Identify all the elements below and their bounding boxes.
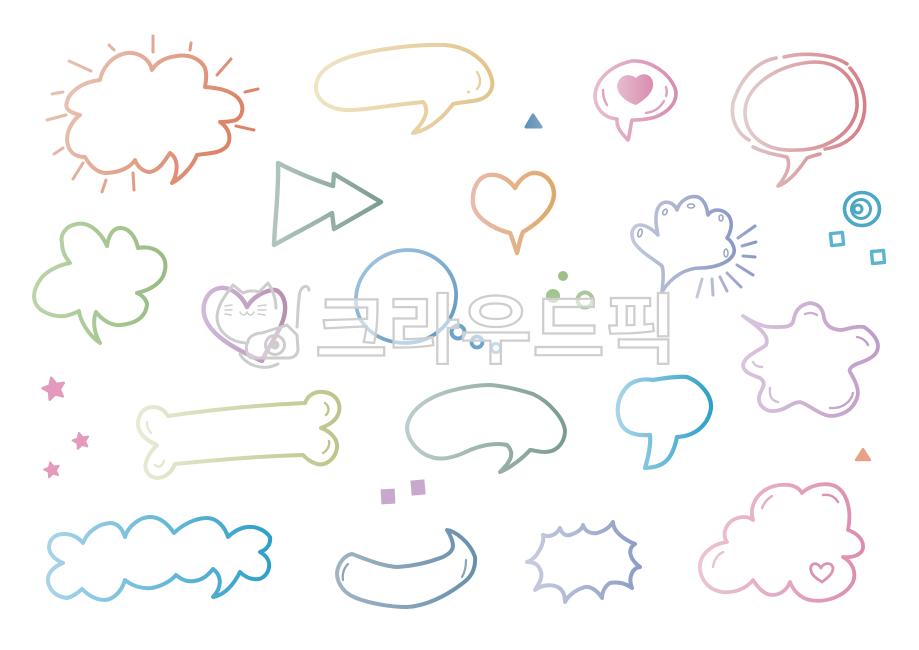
squares: mauve [381, 479, 426, 504]
bubble: pink with heart [595, 61, 676, 140]
bubble: green cloud [34, 224, 165, 343]
triangle: orange [856, 449, 870, 460]
bubble: orange sunburst cloud [47, 36, 258, 192]
bubble: sky blue [618, 377, 711, 468]
bubble: lilac blob [743, 303, 878, 416]
watermark: Korean site name: 크라우드픽 [315, 289, 677, 374]
bubble: bone [138, 392, 339, 478]
bubble: cyan long cloud [48, 517, 270, 600]
watermark: cat camera logo [217, 283, 309, 367]
bubble: periwinkle spiky [527, 522, 640, 602]
icon: heart [617, 74, 653, 105]
bubble: yellow oval [316, 45, 492, 133]
arrow [274, 163, 381, 245]
bubble: blue thought circle [356, 250, 500, 352]
bubble: periwinkle with rays [632, 197, 756, 297]
bubble: slate crescent [337, 530, 475, 607]
bubble: rose double oval [732, 54, 865, 186]
heart: lilac [204, 288, 285, 361]
spiral: teal target [844, 192, 880, 226]
heart: orange [473, 173, 554, 253]
squares: teal [830, 232, 885, 264]
triangle: slate [526, 115, 541, 127]
stars [41, 375, 91, 478]
icon: small heart [811, 564, 833, 582]
bubble: dark teal [407, 385, 565, 472]
dots: green [546, 271, 592, 308]
bubble: pink cloud with heart [700, 484, 863, 601]
